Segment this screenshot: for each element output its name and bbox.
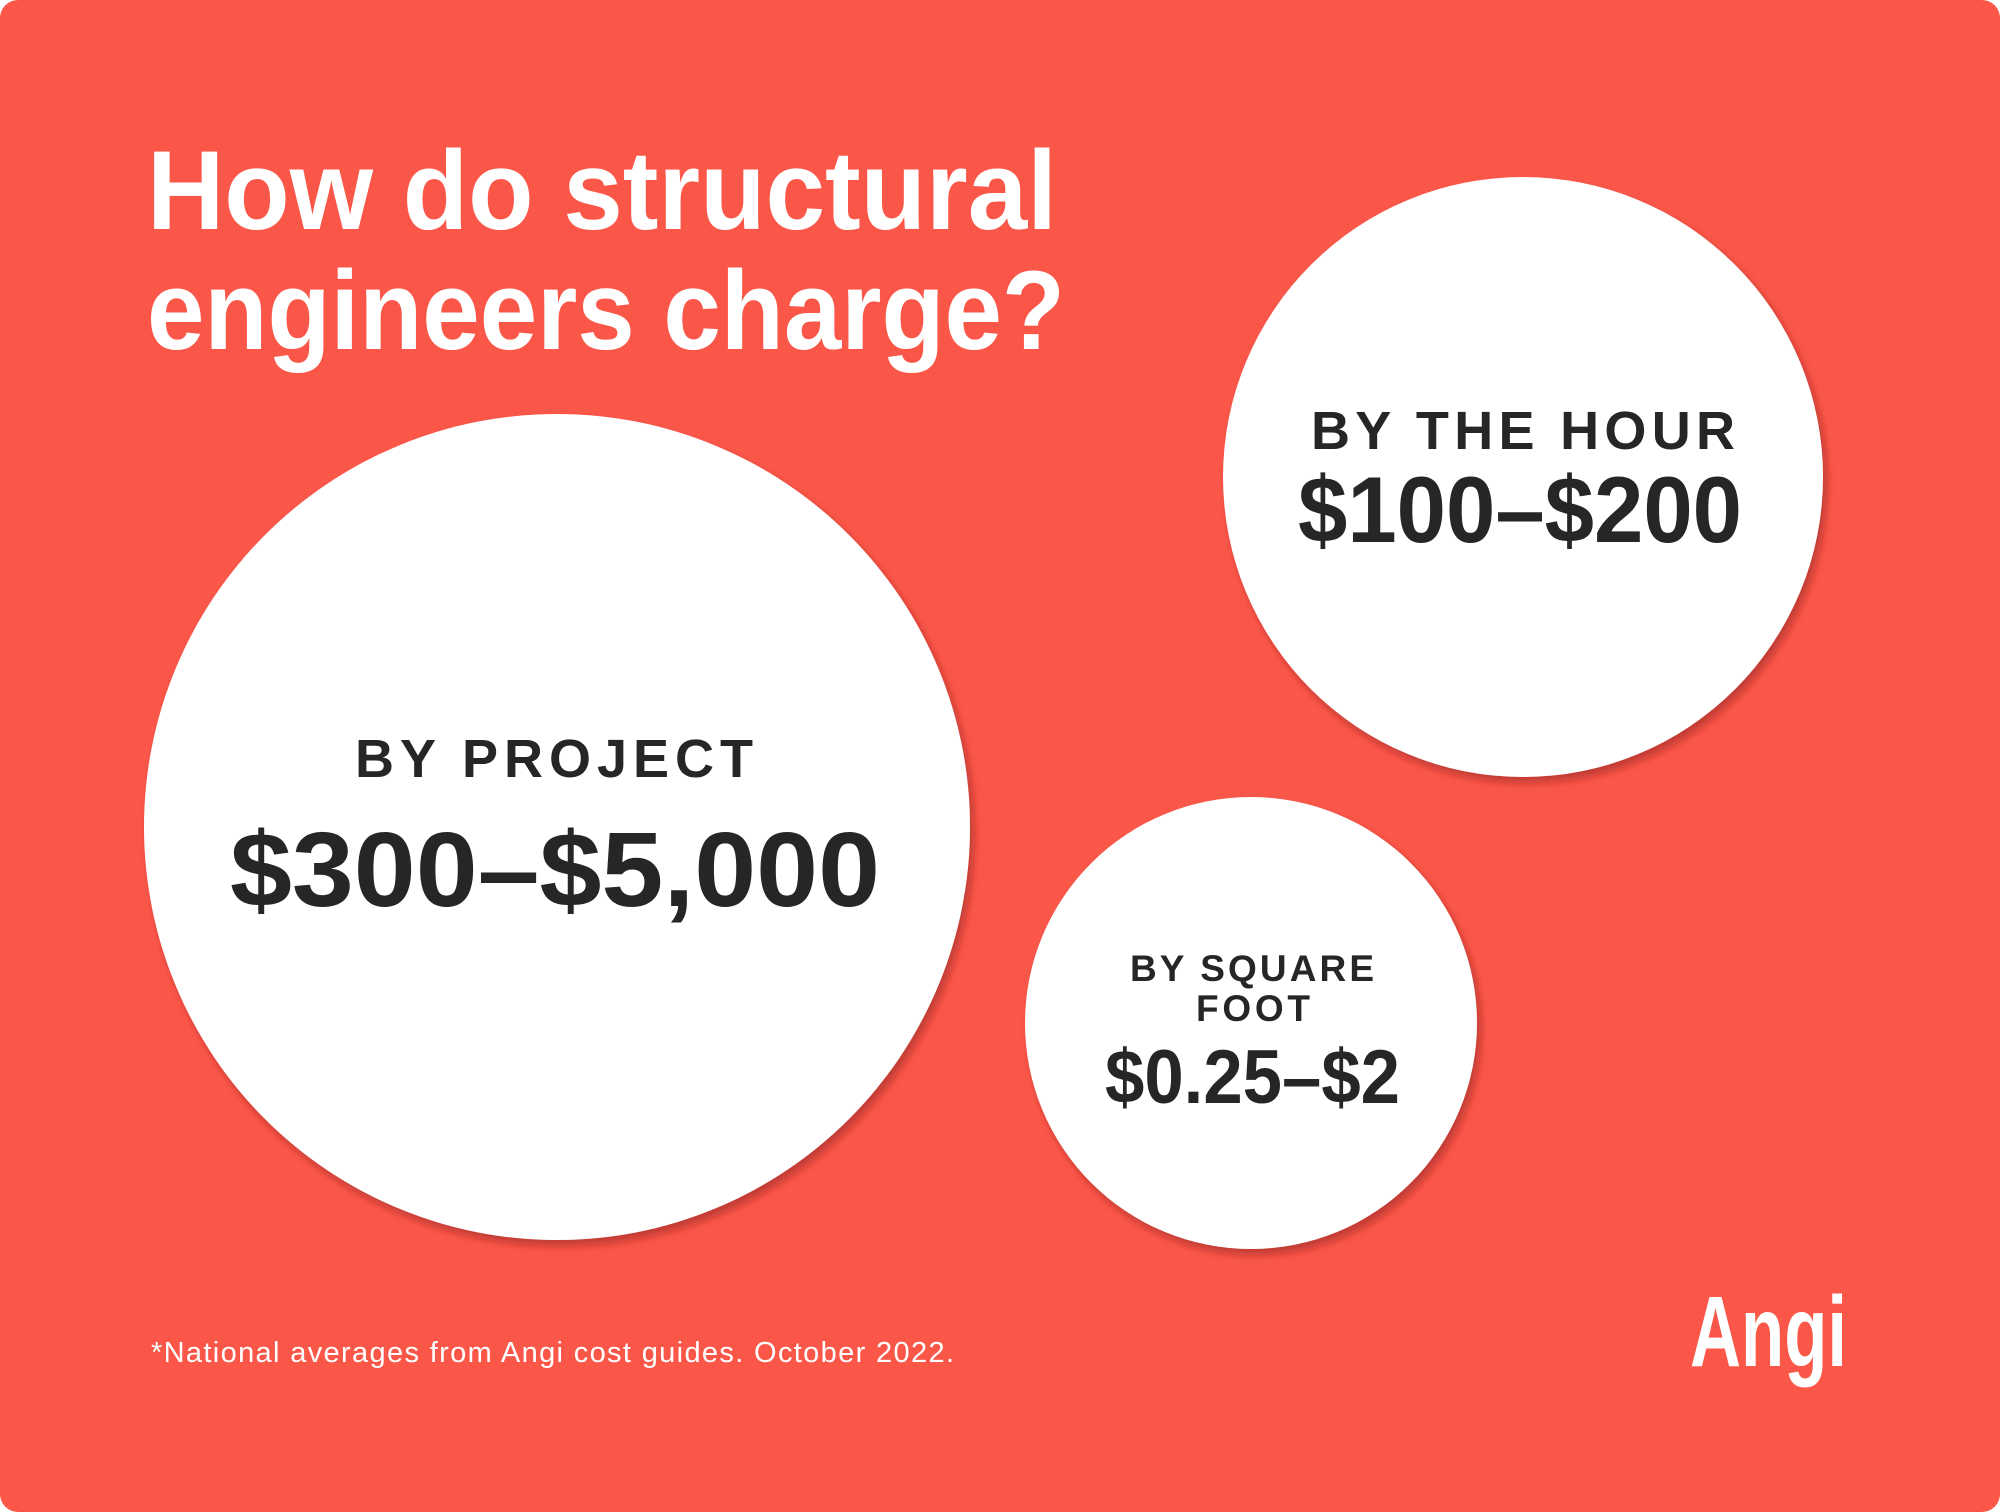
panel: by square foot circle: FOOT (1196, 988, 1310, 1029)
title (147, 128, 1065, 373)
label: by square foot: BY SQUARE (1130, 948, 1374, 989)
footnote: *National averages from Angi cost guides. October 2022. (151, 1337, 954, 1369)
price: by project: $300–$5,000 (230, 811, 880, 929)
label: by project: BY PROJECT (355, 729, 753, 789)
panel: by the hour circle (1223, 177, 1823, 777)
title: engineers charge? (147, 248, 1065, 373)
price: by square foot: $0.25–$2 (1105, 1035, 1400, 1120)
logo: Angi: Angi (1690, 1276, 1847, 1388)
title: How do structural (147, 128, 1057, 253)
label: by the hour: BY THE HOUR (1311, 401, 1735, 461)
price: by the hour: $100–$200 (1298, 457, 1742, 562)
panel: by square foot circle (1025, 797, 1477, 1249)
panel: by project circle (144, 414, 970, 1240)
